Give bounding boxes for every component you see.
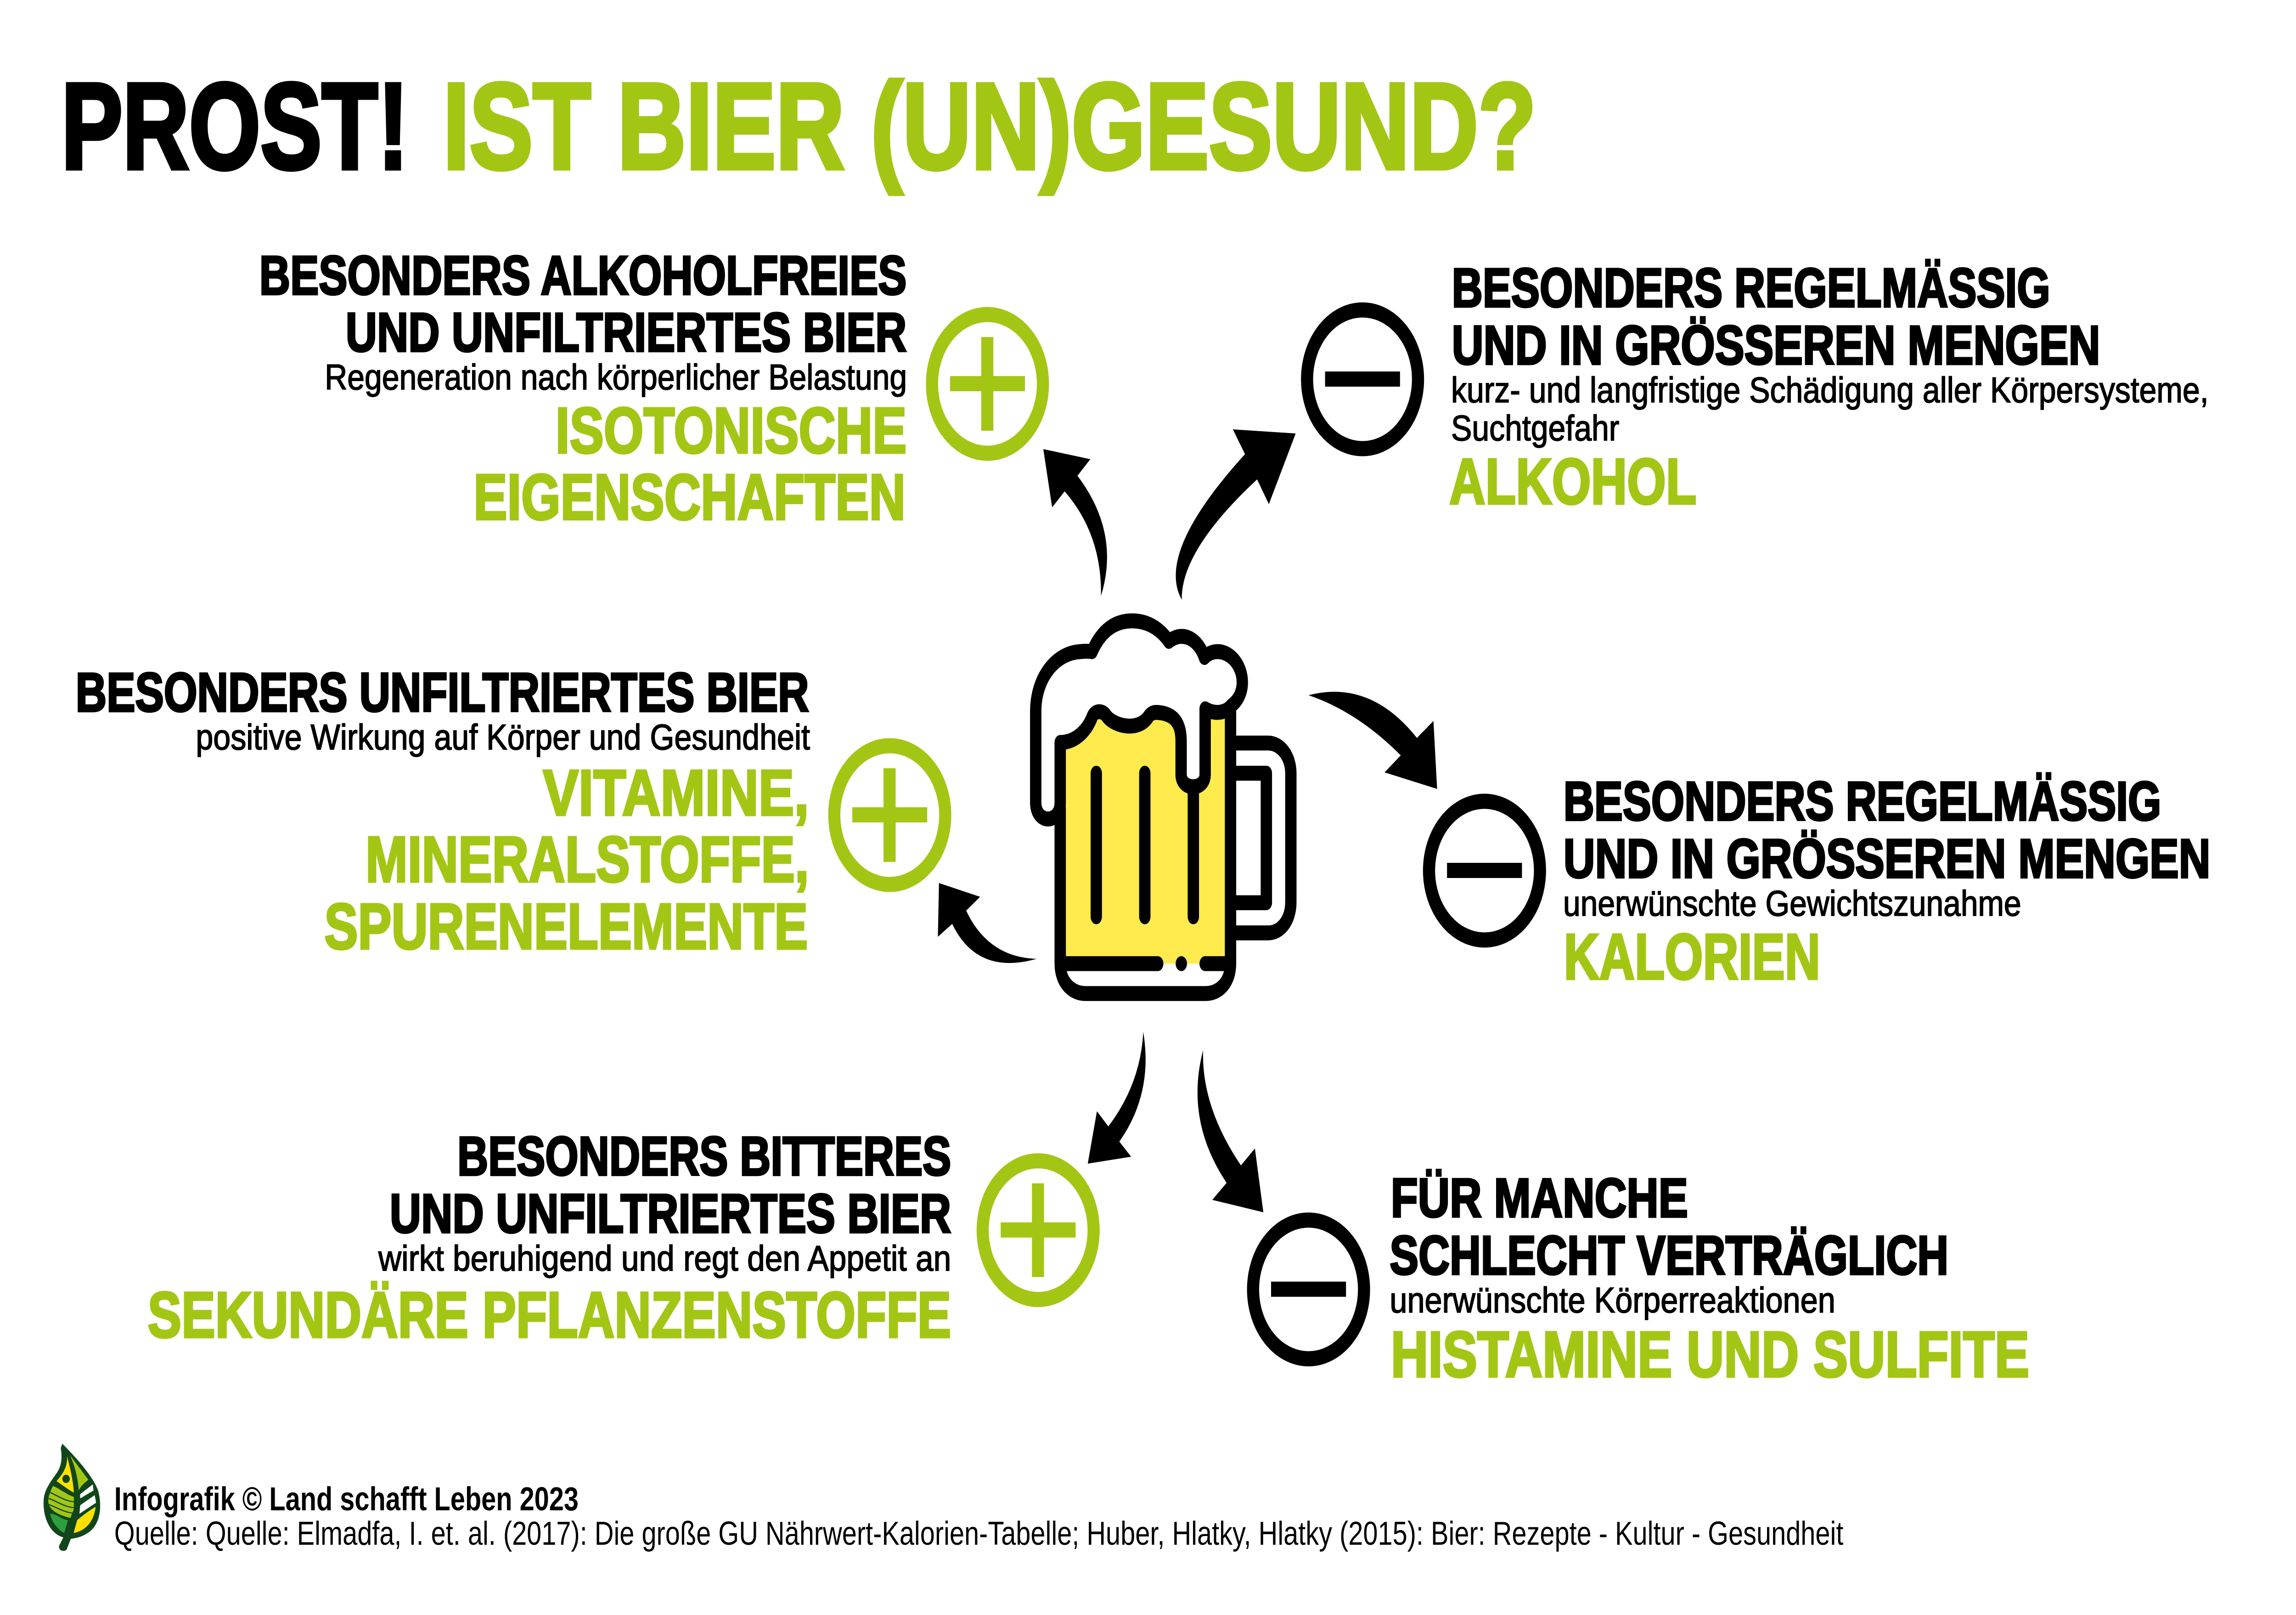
panel: Alkohol: UND IN GRÖSSEREN MENGEN — [1452, 315, 2100, 377]
panel: Histamine und Sulfite: SCHLECHT VERTRÄGLICH — [1390, 1225, 1948, 1287]
icon: minus — [1253, 1220, 1364, 1359]
panel: isotonische Eigenschaften: ISOTONISCHE — [556, 394, 906, 467]
panel: Kalorien — [1429, 771, 2211, 993]
icon: beer mug — [1036, 621, 1291, 994]
panel: Kalorien: KALORIEN — [1564, 921, 1820, 993]
panel: Kalorien: BESONDERS REGELMÄSSIG — [1564, 771, 2161, 833]
icon: minus — [1429, 801, 1540, 940]
arrow: to Histamine und Sulfite — [1198, 1050, 1263, 1212]
panel: isotonische Eigenschaften: BESONDERS ALKOHOLFREIES — [259, 245, 906, 307]
panel: Kalorien: UND IN GRÖSSEREN MENGEN — [1564, 828, 2211, 890]
panel: Histamine und Sulfite: unerwünschte Körperreaktionen — [1390, 1280, 1835, 1320]
arrow: to Alkohol — [1176, 429, 1296, 600]
panel: Vitamine, Mineralstoffe, Spurenelemente: positive Wirkung auf Körper und Gesundheit — [196, 717, 810, 757]
arrow: to Vitamine — [938, 883, 1037, 963]
panel: isotonische Eigenschaften: EIGENSCHAFTEN — [473, 461, 906, 534]
panel: sekundäre Pflanzenstoffe — [148, 1126, 1094, 1351]
panel: Vitamine, Mineralstoffe, Spurenelemente: VITAMINE, — [543, 757, 809, 829]
panel: Histamine und Sulfite: FÜR MANCHE — [1391, 1168, 1688, 1229]
panel: Alkohol: BESONDERS REGELMÄSSIG — [1452, 258, 2050, 319]
icon: plus — [983, 1161, 1094, 1300]
title: PROST! — [62, 58, 409, 195]
panel: Vitamine, Mineralstoffe, Spurenelemente — [76, 662, 945, 963]
panel: Alkohol: Suchtgefahr — [1451, 408, 1619, 448]
arrow: to Kalorien — [1309, 692, 1437, 789]
panel: sekundäre Pflanzenstoffe: SEKUNDÄRE PFLANZENSTOFFE — [148, 1279, 951, 1351]
title: IST BIER (UN)GESUND? — [443, 58, 1536, 195]
panel: Histamine und Sulfite — [1253, 1168, 2029, 1391]
icon: minus — [1307, 310, 1418, 449]
icon: plus — [834, 746, 945, 884]
icon: plus — [932, 315, 1043, 453]
panel: Kalorien: unerwünschte Gewichtszunahme — [1563, 883, 2021, 923]
panel: Histamine und Sulfite: HISTAMINE UND SULFITE — [1391, 1318, 2029, 1391]
panel: isotonische Eigenschaften: Regeneration nach körperlicher Belastung — [325, 357, 907, 397]
panel: Alkohol: ALKOHOL — [1449, 445, 1696, 518]
panel: sekundäre Pflanzenstoffe: wirkt beruhigend und regt den Appetit an — [378, 1238, 951, 1278]
credit line: Infografik © Land schafft Leben 2023 — [114, 1480, 579, 1517]
logo: leaf — [44, 1444, 100, 1551]
panel: Alkohol: kurz- und langfristige Schädigung aller Körpersysteme, — [1451, 370, 2209, 410]
arrow: to isotonische Eigenschaften — [1043, 449, 1107, 596]
panel: Vitamine, Mineralstoffe, Spurenelemente: MINERALSTOFFE, — [366, 823, 809, 896]
panel: sekundäre Pflanzenstoffe: BESONDERS BITTERES — [457, 1126, 951, 1187]
panel: Vitamine, Mineralstoffe, Spurenelemente: BESONDERS UNFILTRIERTES BIER — [76, 662, 809, 724]
panel: Vitamine, Mineralstoffe, Spurenelemente: SPURENELEMENTE — [324, 890, 808, 963]
source line: Quelle: Quelle: Elmadfa, I. et. al. (2017): Die große GU Nährwert-Kalorien-Tabelle; Huber, Hlatky, Hlatky (2015): Bier: Rezepte - Kultur - Gesundheit — [114, 1515, 1843, 1552]
arrow: to sekundäre Pflanzenstoffe — [1088, 1032, 1146, 1164]
panel: Alkohol — [1307, 258, 2209, 518]
panel: isotonische Eigenschaften — [259, 245, 1043, 534]
panel: sekundäre Pflanzenstoffe: UND UNFILTRIERTES BIER — [390, 1183, 951, 1245]
panel: isotonische Eigenschaften: UND UNFILTRIERTES BIER — [346, 302, 906, 364]
